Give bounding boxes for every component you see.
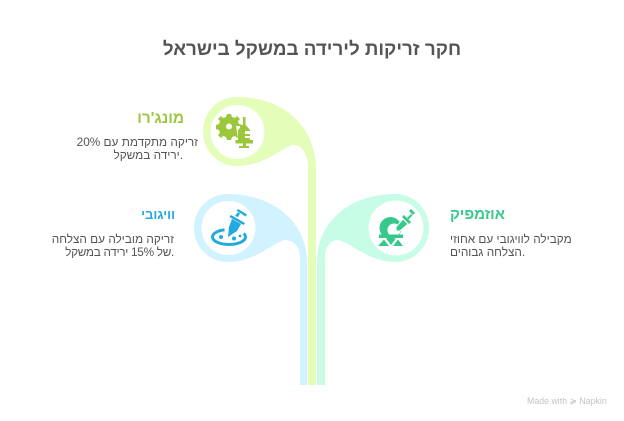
text: Ozempic description: מקבילה לוויגובי עם אחוזי bbox=[450, 232, 572, 246]
text: Ozempic description bbox=[450, 232, 572, 259]
text: Wegovy description: של 15% ירידה במשקל. bbox=[65, 245, 174, 259]
footer: made with Napkin: Made with ≽ Napkin bbox=[527, 396, 607, 406]
text: Mounjaro description bbox=[77, 135, 198, 162]
panel: mint leaf bbox=[317, 194, 429, 385]
title: חקר זריקות לירידה במשקל בישראל bbox=[163, 38, 461, 59]
text: Mounjaro description: ירידה במשקל. bbox=[113, 148, 183, 162]
heading: Mounjaro: מונג'רו bbox=[137, 110, 184, 127]
icon: syringe over petri dish bbox=[212, 209, 250, 244]
panel: blue leaf bbox=[194, 194, 307, 385]
text: Mounjaro description: זריקה מתקדמת עם 20% bbox=[77, 135, 198, 149]
icon: person with syringe bbox=[378, 209, 415, 246]
text: Wegovy description: זריקה מובילה עם הצלחה bbox=[52, 232, 174, 246]
text: Ozempic description: הצלחה גבוהים. bbox=[450, 245, 525, 259]
icon: gear and syringe bbox=[216, 114, 253, 148]
text: Wegovy description bbox=[52, 232, 174, 259]
panel: green leaf bbox=[203, 97, 316, 385]
heading: Wegovy: וויגובי bbox=[141, 207, 175, 222]
heading: Ozempic: אוזמפיק bbox=[450, 206, 505, 223]
